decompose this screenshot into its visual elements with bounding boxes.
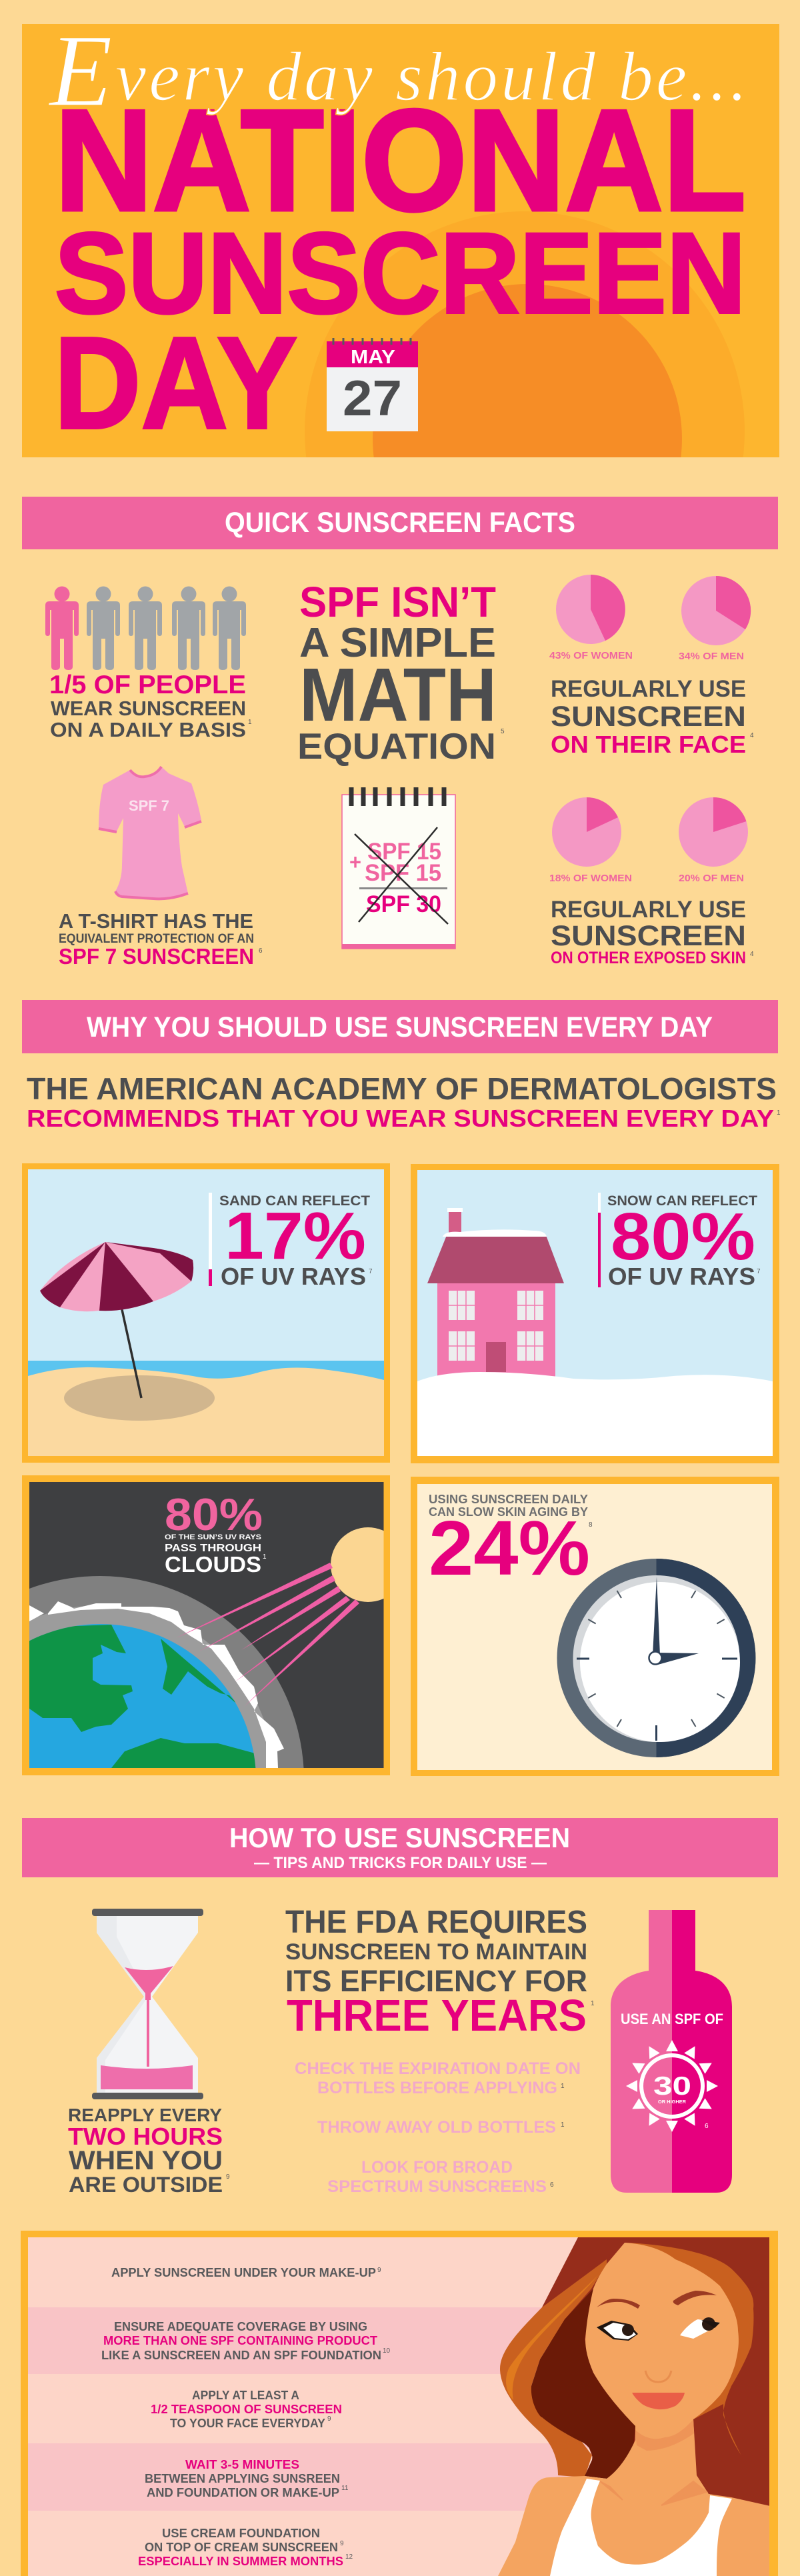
icon: sun badge xyxy=(626,2040,718,2132)
icon: lips xyxy=(632,2393,685,2409)
icon: sun badge: OR HIGHER xyxy=(658,2100,686,2105)
icon: notepad with crossed-out sum: SPF 15 xyxy=(365,860,441,886)
text: sand reflects 17 percent xyxy=(209,1193,373,1290)
text: t-shirt equivalent xyxy=(59,909,263,969)
panel: uv passes through clouds xyxy=(22,1475,390,1775)
text: t-shirt equivalent: 6 xyxy=(259,947,263,955)
heading: dermatologists recommendation: THE AMERICAN ACADEMY OF DERMATOLOGISTS xyxy=(27,1071,777,1106)
text: bottle tips: 6 xyxy=(550,2181,554,2189)
heading: spf is not a simple math equation: SPF ISN’T xyxy=(299,578,496,626)
panel: spf math xyxy=(297,578,505,949)
pie chart: 18% of women: 18% OF WOMEN xyxy=(549,873,632,884)
tip: cream foundation: ESPECIALLY IN SUMMER MONTHS xyxy=(138,2555,343,2568)
text: one in five people: WEAR SUNSCREEN xyxy=(51,697,246,720)
section header: how to use sunscreen: HOW TO USE SUNSCREEN xyxy=(229,1822,570,1853)
heading: spf is not a simple math equation: 5 xyxy=(501,728,505,735)
tip: adequate coverage: LIKE A SUNSCREEN AND AN SPF FOUNDATION xyxy=(101,2349,381,2362)
text: snow reflects 80 percent: 80% xyxy=(611,1199,755,1274)
panel: t-shirt spf xyxy=(59,767,263,969)
heading: dermatologists recommendation xyxy=(27,1071,781,1132)
text: sand reflects 17 percent: 17% xyxy=(225,1199,366,1273)
pie chart: 34% of men xyxy=(679,576,751,662)
text: t-shirt equivalent: SPF 7 SUNSCREEN xyxy=(59,944,254,969)
text: bottle tips: SPECTRUM SUNSCREENS xyxy=(327,2177,547,2196)
heading: fda three years: ITS EFFICIENCY FOR xyxy=(285,1964,587,1998)
text: t-shirt equivalent: EQUIVALENT PROTECTION OF AN xyxy=(59,932,254,946)
text: bottle tips: 1 xyxy=(561,2121,565,2129)
text: one in five people: ON A DAILY BASIS xyxy=(50,718,246,741)
tip: wait minutes: 11 xyxy=(341,2485,349,2492)
panel: face sunscreen use xyxy=(549,575,754,758)
text: regularly use on exposed skin: SUNSCREEN xyxy=(551,920,746,952)
pie chart: 34% of men: 34% OF MEN xyxy=(679,651,744,662)
text: 80 percent through clouds: 1 xyxy=(263,1553,267,1561)
icon: left eye xyxy=(597,2321,638,2341)
pie chart: 20% of men xyxy=(679,797,748,884)
section header: quick sunscreen facts: QUICK SUNSCREEN FACTS xyxy=(225,507,575,539)
text: snow reflects 80 percent: OF UV RAYS xyxy=(608,1263,755,1290)
text: regularly use on exposed skin: REGULARLY USE xyxy=(551,897,746,923)
tip: apply under make-up: 9 xyxy=(377,2267,381,2274)
title: national sunscreen day xyxy=(54,79,746,456)
icon: calendar may 27: MAY xyxy=(351,347,395,368)
icon: eyebrows xyxy=(597,2291,717,2309)
icon: notepad with crossed-out sum xyxy=(342,787,455,949)
text: aging by 24 percent: 8 xyxy=(589,1521,593,1529)
icon: earth with atmosphere xyxy=(29,1527,384,1768)
text: sand reflects 17 percent: SAND CAN REFLECT xyxy=(219,1193,370,1209)
script subtitle: very day should be... xyxy=(115,37,747,115)
tip: half teaspoon xyxy=(151,2389,342,2430)
text: bottle tips xyxy=(295,2059,581,2196)
heading: spf is not a simple math equation xyxy=(297,578,505,767)
section header: quick sunscreen facts xyxy=(22,497,778,549)
tip: cream foundation: ON TOP OF CREAM SUNSCREEN xyxy=(145,2541,338,2554)
icon: sun rays xyxy=(176,1563,359,1707)
icon: calendar may 27: 27 xyxy=(343,370,402,426)
pie chart: 43% of women: 43% OF WOMEN xyxy=(549,650,633,661)
text: bottle tips: CHECK THE EXPIRATION DATE ON xyxy=(295,2059,581,2078)
tip: adequate coverage: 10 xyxy=(383,2347,391,2355)
tip: wait minutes: AND FOUNDATION OR MAKE-UP xyxy=(147,2486,339,2499)
icon: five people xyxy=(45,587,246,670)
tip: half teaspoon: APPLY AT LEAST A xyxy=(192,2389,299,2402)
section header: why use sunscreen xyxy=(22,1000,778,1053)
icon: hourglass xyxy=(92,1909,203,2099)
text: 80 percent through clouds xyxy=(165,1489,267,1577)
tip: cream foundation xyxy=(138,2527,353,2568)
text: reapply every two hours xyxy=(68,2105,230,2197)
panel: slow skin aging xyxy=(411,1477,779,1776)
tip: adequate coverage: ENSURE ADEQUATE COVERAGE BY USING xyxy=(114,2320,367,2333)
text: aging by 24 percent: CAN SLOW SKIN AGING BY xyxy=(429,1505,588,1519)
text: regularly use on face: ON THEIR FACE xyxy=(551,731,746,758)
script subtitle: E xyxy=(48,13,113,128)
pie chart: 18% of women xyxy=(549,797,632,884)
text: one in five people: 1 xyxy=(248,719,252,726)
icon: clock xyxy=(557,1559,756,1757)
hero banner xyxy=(22,24,779,457)
text: 80 percent through clouds: 80% xyxy=(165,1489,263,1540)
text: reapply every two hours: 9 xyxy=(226,2173,230,2181)
icon: house in snow xyxy=(427,1208,564,1379)
tip: adequate coverage xyxy=(101,2320,391,2362)
section header: why use sunscreen: WHY YOU SHOULD USE SUNSCREEN EVERY DAY xyxy=(87,1011,713,1043)
pie chart: 20% of men: 20% OF MEN xyxy=(679,873,744,884)
tip: wait minutes: BETWEEN APPLYING SUNSREEN xyxy=(145,2472,340,2485)
tip: cream foundation: 12 xyxy=(345,2553,353,2561)
icon: notepad with crossed-out sum: + xyxy=(349,850,361,874)
icon: sun badge: 30 xyxy=(653,2072,691,2101)
panel: one in five people xyxy=(45,587,252,741)
panel: make-up tips with woman xyxy=(21,2231,778,2576)
heading: fda three years: SUNSCREEN TO MAINTAIN xyxy=(285,1939,587,1965)
tip: cream foundation: USE CREAM FOUNDATION xyxy=(162,2527,320,2540)
heading: dermatologists recommendation: RECOMMENDS THAT YOU WEAR SUNSCREEN EVERY DAY xyxy=(27,1105,774,1132)
icon: spf 30 sunscreen bottle xyxy=(611,1910,732,2193)
text: regularly use on exposed skin: ON OTHER EXPOSED SKIN xyxy=(551,949,746,967)
title: national sunscreen day: DAY xyxy=(54,310,297,456)
text: aging by 24 percent: 24% xyxy=(429,1505,590,1591)
text: regularly use on exposed skin: 4 xyxy=(750,951,754,958)
text: aging by 24 percent: USING SUNSCREEN DAILY xyxy=(429,1493,588,1506)
icon: spf 30 sunscreen bottle: USE AN SPF OF xyxy=(621,2011,723,2027)
text: t-shirt equivalent: A T-SHIRT HAS THE xyxy=(59,909,253,933)
text: regularly use on face xyxy=(551,676,754,758)
tip: apply under make-up: APPLY SUNSCREEN UNDER YOUR MAKE-UP xyxy=(111,2266,376,2279)
heading: dermatologists recommendation: 1 xyxy=(777,1109,781,1117)
text: regularly use on face: SUNSCREEN xyxy=(551,701,746,733)
heading: fda three years xyxy=(285,1905,595,2041)
text: one in five people xyxy=(49,671,252,741)
illustration: woman xyxy=(498,2237,770,2576)
icon: beach umbrella xyxy=(40,1242,215,1421)
text: sand reflects 17 percent: 7 xyxy=(369,1268,373,1275)
tip: adequate coverage: MORE THAN ONE SPF CONTAINING PRODUCT xyxy=(103,2334,377,2347)
heading: fda three years: 1 xyxy=(591,2000,595,2007)
section header: how to use sunscreen xyxy=(22,1818,778,1877)
heading: fda three years: THREE YEARS xyxy=(287,1991,587,2041)
heading: spf is not a simple math equation: EQUATION xyxy=(297,725,496,767)
icon: t-shirt: SPF 7 xyxy=(129,797,169,814)
text: 80 percent through clouds: PASS THROUGH xyxy=(165,1543,261,1554)
pie chart: 43% of women xyxy=(549,575,633,661)
text: reapply every two hours: TWO HOURS xyxy=(68,2123,223,2150)
text: bottle tips: 1 xyxy=(561,2083,565,2090)
text: snow reflects 80 percent xyxy=(598,1193,761,1290)
title: national sunscreen day: NATIONAL xyxy=(55,79,746,241)
panel: sand reflects uv xyxy=(22,1163,390,1463)
text: snow reflects 80 percent: SNOW CAN REFLECT xyxy=(607,1193,757,1209)
tip: half teaspoon: 1/2 TEASPOON OF SUNSCREEN xyxy=(151,2403,342,2416)
heading: spf is not a simple math equation: MATH xyxy=(299,653,497,737)
icon: t-shirt xyxy=(99,767,201,899)
tip: wait minutes: WAIT 3-5 MINUTES xyxy=(185,2458,299,2471)
icon: notepad with crossed-out sum: SPF 30 xyxy=(366,891,441,917)
tip: cream foundation: 9 xyxy=(340,2540,344,2547)
text: 80 percent through clouds: OF THE SUN’S UV RAYS xyxy=(165,1533,261,1541)
text: snow reflects 80 percent: 7 xyxy=(757,1268,761,1275)
text: regularly use on face: REGULARLY USE xyxy=(551,676,746,702)
panel: snow reflects uv xyxy=(411,1164,779,1463)
text: regularly use on exposed skin xyxy=(551,897,754,967)
text: bottle tips: THROW AWAY OLD BOTTLES xyxy=(317,2118,556,2137)
icon: right eye xyxy=(680,2317,720,2339)
text: one in five people: 1/5 OF PEOPLE xyxy=(49,671,246,699)
heading: spf is not a simple math equation: A SIMPLE xyxy=(299,620,496,666)
panel: exposed skin sunscreen use xyxy=(549,797,754,967)
text: bottle tips: BOTTLES BEFORE APPLYING xyxy=(317,2079,557,2097)
section header: how to use sunscreen: — TIPS AND TRICKS FOR DAILY USE — xyxy=(254,1854,547,1872)
tip: half teaspoon: TO YOUR FACE EVERYDAY xyxy=(170,2417,325,2430)
text: regularly use on face: 4 xyxy=(750,732,754,739)
icon: setting sun xyxy=(305,211,745,457)
text: sand reflects 17 percent: OF UV RAYS xyxy=(221,1263,366,1290)
icon: notepad with crossed-out sum: SPF 15 xyxy=(367,839,441,865)
tip: wait minutes xyxy=(145,2458,349,2499)
text: 80 percent through clouds: CLOUDS xyxy=(165,1552,261,1577)
icon: calendar may 27 xyxy=(327,338,418,431)
text: bottle tips: LOOK FOR BROAD xyxy=(361,2158,513,2177)
heading: fda three years: THE FDA REQUIRES xyxy=(285,1905,587,1940)
tip: half teaspoon: 9 xyxy=(327,2415,331,2423)
icon: spf 30 sunscreen bottle: 6 xyxy=(705,2123,709,2130)
text: reapply every two hours: ARE OUTSIDE xyxy=(69,2173,223,2197)
title: national sunscreen day: SUNSCREEN xyxy=(55,209,746,337)
text: reapply every two hours: WHEN YOU xyxy=(69,2146,223,2175)
text: reapply every two hours: REAPPLY EVERY xyxy=(68,2105,222,2125)
